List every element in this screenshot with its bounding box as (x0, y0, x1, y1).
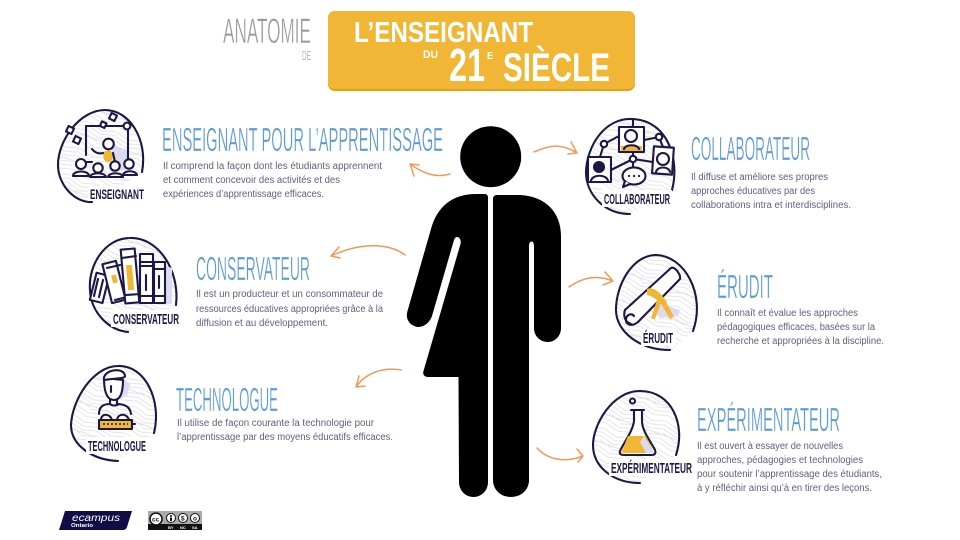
logo: creative commons licence: o (193, 516, 197, 522)
arrow: to collaborateur (534, 142, 577, 154)
panel: erudit: ÉRUDIT (717, 268, 773, 305)
text: ANATOMIE (223, 12, 311, 51)
text: experimentateur description (697, 441, 882, 494)
title banner: L’ENSEIGNANT (354, 17, 533, 49)
title: anatomie de: DE (302, 48, 311, 63)
title banner (328, 11, 635, 91)
panel: technologue: TECHNOLOGUE (176, 381, 278, 418)
logo: ecampus ontario (59, 511, 132, 530)
panel: collaborateur (586, 119, 851, 214)
icon: person with laptop: TECHNOLOGUE (88, 438, 146, 455)
panel: enseignant (58, 110, 443, 202)
panel: erudit (616, 255, 884, 350)
icon: books: CONSERVATEUR (113, 311, 179, 328)
icon: enseignant teaching students (58, 110, 146, 202)
text: erudit description: pédagogiques efficaces, basées sur la (717, 322, 876, 333)
text: ENSEIGNANT POUR L’APPRENTISSAGE (162, 121, 443, 158)
icon: books (90, 238, 181, 332)
icon: diploma scroll (616, 255, 697, 350)
text: enseignant description: Il comprend la façon dont les étudiants apprennent (163, 161, 382, 172)
text: collaborateur description: Il diffuse et améliore ses propres (691, 172, 828, 183)
arrow: to experimentateur (537, 448, 583, 462)
text: erudit description (717, 308, 884, 347)
text: technologue description (177, 418, 393, 443)
title banner: E (487, 51, 493, 62)
text: enseignant description: expériences d’apprentissage efficaces. (163, 189, 324, 200)
icon: flask: EXPÉRIMENTATEUR (611, 460, 692, 477)
icon: connected collaborators (586, 119, 674, 214)
title banner: 21 (449, 39, 485, 91)
central figure: half woman half man (407, 126, 561, 497)
icon: diploma scroll: ÉRUDIT (643, 330, 673, 347)
text: collaborateur description (691, 172, 851, 211)
logo: ecampus ontario: Ontario (71, 523, 93, 529)
icon: enseignant teaching students: ENSEIGNANT (90, 186, 144, 202)
text: erudit description: recherche et appropriées à la discipline. (717, 336, 884, 347)
arrow: to conservateur (331, 246, 405, 258)
text: enseignant description: et comment concevoir des activités et des (163, 175, 340, 186)
logo: creative commons licence: SA (192, 525, 198, 530)
title: anatomie de (223, 12, 311, 63)
title banner: SIÈCLE (503, 45, 610, 90)
logo: creative commons licence: cc (152, 516, 160, 524)
panel: conservateur: CONSERVATEUR (196, 250, 310, 287)
text: technologue description: Il utilise de façon courante la technologie pour (177, 418, 375, 429)
logo: creative commons licence: BY (168, 525, 174, 530)
text: experimentateur description: Il est ouvert à essayer de nouvelles (697, 441, 843, 452)
title banner: DU (423, 49, 438, 61)
text: erudit description: Il connaît et évalue les approches (717, 308, 858, 319)
text: collaborateur description: collaborations intra et interdisciplines. (691, 200, 851, 211)
logo: creative commons licence: $ (181, 516, 185, 522)
icon: connected collaborators: COLLABORATEUR (604, 191, 670, 208)
logo: ecampus ontario: ecampus (72, 513, 120, 524)
logo: creative commons licence (148, 511, 202, 530)
logo: creative commons licence: NC (180, 525, 186, 530)
text: technologue description: l’apprentissage par des moyens éducatifs efficaces. (177, 432, 393, 443)
text: conservateur description: diffusion et au développement. (196, 318, 328, 329)
panel: experimentateur (593, 391, 882, 494)
text: experimentateur description: pour soutenir l’apprentissage des étudiants, (697, 469, 882, 480)
text: conservateur description (196, 289, 384, 329)
text: conservateur description: Il est un producteur et un consommateur de (196, 289, 383, 300)
text: experimentateur description: à y réfléchir ainsi qu’à en tirer des leçons. (697, 483, 872, 494)
text: conservateur description: ressources éducatives appropriées grâce à la (196, 304, 384, 315)
text: enseignant description (163, 161, 382, 200)
text: experimentateur description: approches, pédagogies et technologies (697, 455, 863, 466)
panel: conservateur (90, 238, 384, 332)
icon: flask (593, 391, 694, 483)
arrow: to enseignant (410, 164, 450, 176)
arrow: to technologue (356, 369, 401, 387)
panel: technologue (71, 366, 393, 461)
arrow: to erudit (569, 272, 613, 287)
text: collaborateur description: approches éducatives par des (691, 186, 815, 197)
icon: person with laptop (71, 366, 157, 461)
